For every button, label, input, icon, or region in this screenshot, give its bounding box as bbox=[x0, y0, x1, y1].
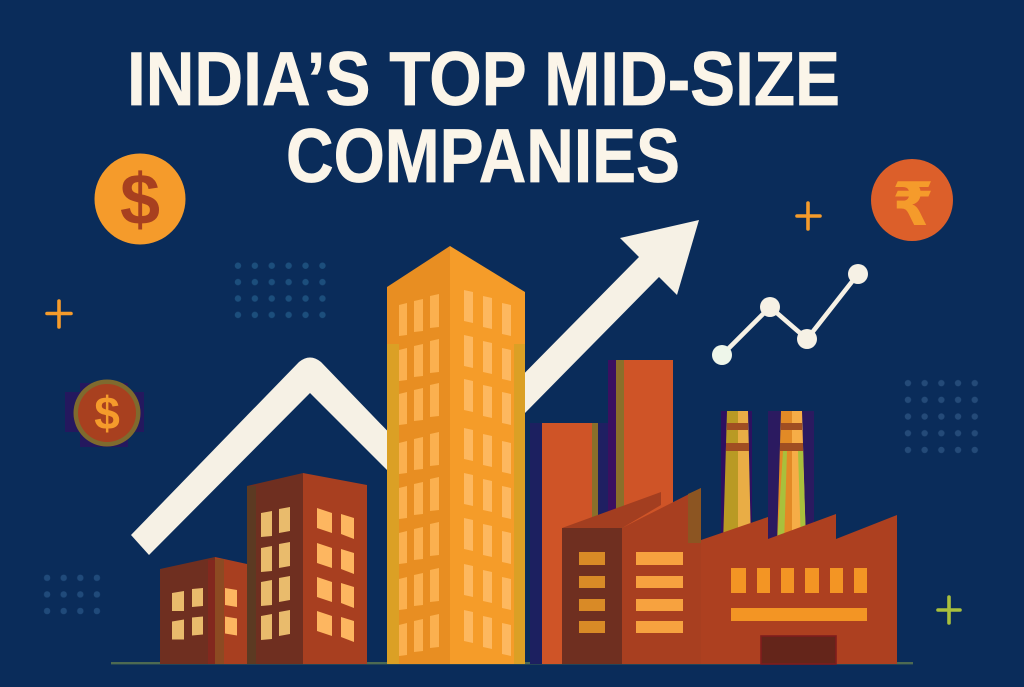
background bar left bbox=[530, 423, 616, 664]
title: INDIA’S TOP MID-SIZE bbox=[127, 37, 840, 122]
factory door bbox=[761, 636, 836, 664]
dot grid: upper left bbox=[230, 258, 331, 323]
small building bbox=[160, 557, 247, 664]
chimney right bbox=[768, 411, 814, 551]
dot grid: lower left bbox=[39, 570, 105, 619]
factory bbox=[530, 360, 897, 664]
factory mid face bbox=[622, 488, 701, 664]
icon: dollar coin small: $ bbox=[94, 387, 120, 439]
icon: dollar coin small bbox=[65, 380, 144, 447]
background bar right bbox=[608, 360, 673, 560]
medium building bbox=[247, 473, 367, 664]
factory right hall bbox=[701, 514, 897, 664]
factory roof bbox=[562, 492, 661, 528]
icon: dollar coin large bbox=[94, 154, 186, 244]
icon: rupee coin bbox=[871, 159, 953, 241]
ground line bbox=[111, 662, 913, 664]
icon: plus upper right bbox=[797, 203, 820, 229]
icon: plus lower right bbox=[938, 597, 960, 623]
chimney left bbox=[721, 411, 752, 551]
factory left dark face bbox=[562, 528, 622, 664]
hall window strip bbox=[731, 608, 867, 621]
factory mid face fringe bbox=[688, 488, 701, 543]
icon: rupee coin: ₹ bbox=[892, 171, 934, 238]
small line chart bbox=[712, 264, 868, 365]
growth arrow bbox=[131, 220, 699, 555]
dot grid: right bbox=[900, 375, 983, 458]
hall windows bbox=[731, 568, 867, 593]
title bbox=[127, 37, 840, 199]
tall tower bbox=[387, 246, 525, 664]
mid face windows bbox=[636, 552, 683, 633]
icon: dollar coin large: $ bbox=[120, 160, 160, 240]
title: COMPANIES bbox=[286, 114, 680, 199]
icon: plus left bbox=[47, 301, 71, 327]
left face windows bbox=[579, 552, 605, 633]
